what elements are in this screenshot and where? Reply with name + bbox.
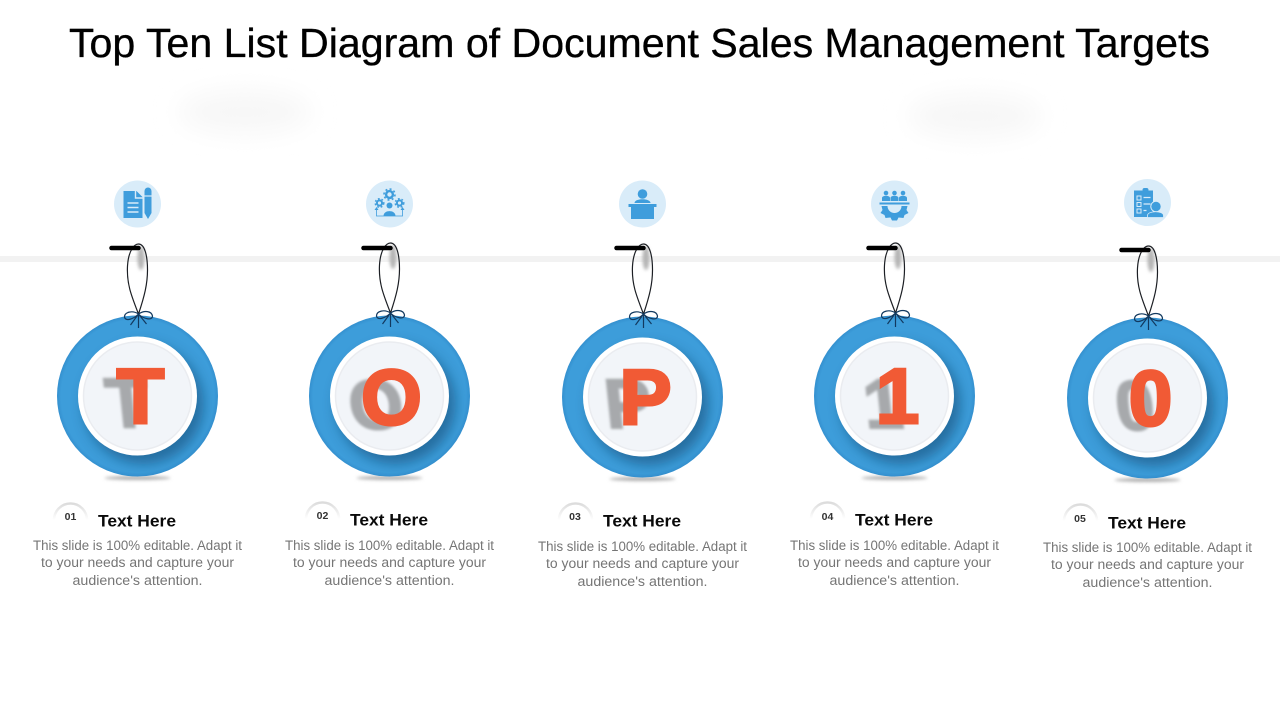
blurred background smudge left xyxy=(179,90,311,134)
ring badge with letter P: P xyxy=(600,364,655,443)
number badge 01: 01 xyxy=(65,511,76,523)
ring badge with digit 1: 1 xyxy=(876,352,919,440)
number badge 05 xyxy=(1064,504,1097,525)
description: This slide is 100% editable. Adapt it xyxy=(1043,540,1252,555)
description: audience's attention. xyxy=(72,573,202,588)
description xyxy=(33,538,242,588)
description xyxy=(790,538,999,588)
description: audience's attention. xyxy=(1082,575,1212,590)
icon: team above gear xyxy=(871,180,918,228)
icon: document and pencil xyxy=(114,180,161,228)
description: This slide is 100% editable. Adapt it xyxy=(33,538,242,553)
unit 2: letter O xyxy=(285,180,494,588)
ring badge with letter T: T xyxy=(117,352,164,440)
unit 3: letter P xyxy=(538,180,747,589)
number badge 05: 05 xyxy=(1074,513,1086,525)
description: to your needs and capture your xyxy=(41,555,235,570)
description: to your needs and capture your xyxy=(798,555,992,570)
ring badge with letter O: O xyxy=(361,353,422,441)
ring badge with letter O xyxy=(309,316,470,480)
ring badge with digit 0: 0 xyxy=(1129,354,1172,442)
description xyxy=(285,538,494,588)
hanging ribbon and bar xyxy=(616,244,658,328)
ring badge with digit 0: 0 xyxy=(1111,366,1159,445)
description: to your needs and capture your xyxy=(293,555,487,570)
description: audience's attention. xyxy=(830,573,960,588)
description: This slide is 100% editable. Adapt it xyxy=(790,538,999,553)
unit 1: letter T xyxy=(33,180,242,588)
description: audience's attention. xyxy=(578,574,708,589)
ring badge with letter T: T xyxy=(101,363,153,442)
heading: Text Here xyxy=(98,512,176,530)
horizontal hanging rail xyxy=(0,256,1280,262)
heading: Text Here xyxy=(855,512,933,530)
icon: gears and person xyxy=(366,180,413,228)
number badge 03: 03 xyxy=(569,511,581,523)
heading: Text Here xyxy=(1108,514,1186,532)
number badge 04: 04 xyxy=(822,511,833,523)
unit 4: digit 1 xyxy=(790,180,999,588)
ring badge with digit 1 xyxy=(814,316,975,480)
heading: Text Here xyxy=(350,512,428,530)
description: to your needs and capture your xyxy=(1051,557,1245,572)
number badge 01 xyxy=(54,504,87,523)
ring badge with letter P: P xyxy=(619,353,672,441)
hanging ribbon and bar xyxy=(868,243,910,327)
icon: person at desk xyxy=(619,180,666,228)
number badge 02: 02 xyxy=(317,510,328,522)
number badge 02 xyxy=(306,502,339,522)
description: This slide is 100% editable. Adapt it xyxy=(538,539,747,554)
blurred background smudge right xyxy=(909,94,1041,138)
ring badge with letter T xyxy=(57,316,218,480)
icon: clipboard checklist with person xyxy=(1124,179,1171,226)
number badge 03 xyxy=(559,504,592,523)
number badge 04 xyxy=(811,502,844,523)
description xyxy=(1043,540,1252,590)
ring badge with letter P xyxy=(562,316,723,481)
description: This slide is 100% editable. Adapt it xyxy=(285,538,494,553)
hanging ribbon and bar xyxy=(112,244,152,328)
description: to your needs and capture your xyxy=(546,556,740,571)
heading: Text Here xyxy=(603,512,681,530)
ring badge with digit 1: 1 xyxy=(859,364,907,443)
hanging ribbon and bar xyxy=(1122,246,1162,330)
ring badge with letter O: O xyxy=(345,365,407,444)
title: Top Ten List Diagram of Document Sales Management Targets xyxy=(69,20,1210,66)
description: audience's attention. xyxy=(324,573,454,588)
ring badge with digit 0 xyxy=(1067,318,1228,482)
description xyxy=(538,539,747,589)
unit 5: digit 0 xyxy=(1043,179,1252,590)
hanging ribbon and bar xyxy=(364,243,404,327)
